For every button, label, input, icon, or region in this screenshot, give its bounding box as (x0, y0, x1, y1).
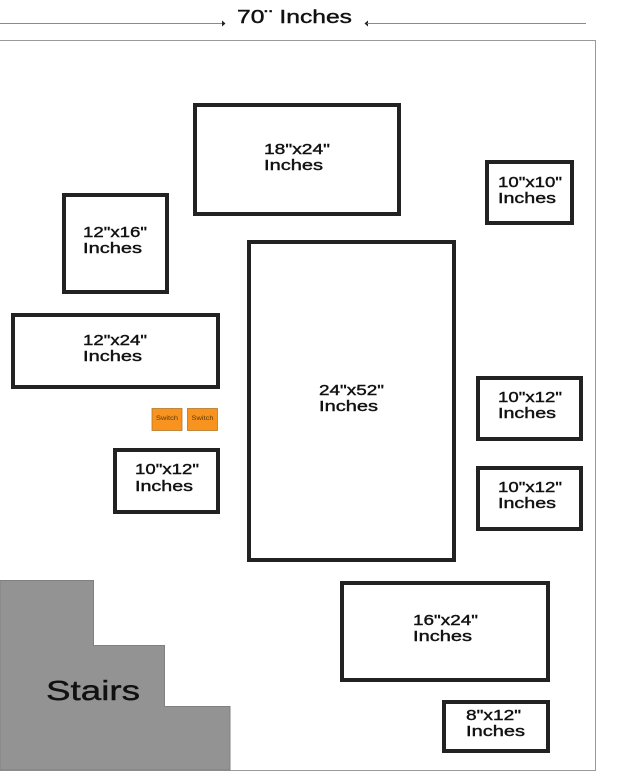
frame 10x10: Inches (498, 190, 556, 207)
frame 12x24 (13, 315, 218, 387)
frame 10x10 (487, 162, 572, 223)
stairs: Stairs (46, 675, 140, 706)
frame 18x24: 18"x24" (264, 141, 330, 158)
frame 10x12 right lower: Inches (498, 495, 556, 512)
frame 10x12 right upper (478, 378, 581, 439)
frame 18x24 (195, 105, 399, 214)
frame 16x24: 16"x24" (413, 612, 478, 629)
frame 8x12 (444, 702, 548, 751)
frame 24x52 (249, 242, 454, 560)
frame 10x10: 10"x10" (498, 174, 562, 191)
light switches: Switch (156, 416, 178, 422)
frame 12x16: Inches (83, 240, 142, 257)
frame 18x24: Inches (264, 157, 323, 174)
width dimension: 70 inches: 70¨ Inches (237, 7, 352, 27)
frame 10x12 right lower (478, 468, 581, 529)
light switches: Switch (192, 416, 214, 422)
stairs (0, 580, 230, 770)
frame 10x12 left (115, 450, 218, 512)
frame 10x12 right upper: 10"x12" (498, 389, 562, 406)
frame 10x12 left: 10"x12" (135, 461, 199, 478)
frame 10x12 right upper: Inches (498, 405, 556, 422)
width dimension: 70 inches (0, 7, 586, 27)
frame 24x52: 24"x52" (319, 382, 384, 399)
frame 12x16: 12"x16" (83, 224, 147, 241)
frame 8x12: Inches (466, 723, 525, 740)
light switches (152, 408, 218, 430)
frame 10x12 right lower: 10"x12" (498, 479, 562, 496)
frame 8x12: 8"x12" (466, 707, 521, 724)
frame 16x24: Inches (413, 628, 472, 645)
frame 16x24 (342, 583, 548, 680)
frame 12x24: 12"x24" (83, 332, 147, 349)
frame 10x12 left: Inches (135, 478, 193, 495)
frame 12x16 (64, 195, 167, 292)
frame 12x24: Inches (83, 348, 142, 365)
frame 24x52: Inches (319, 398, 378, 415)
